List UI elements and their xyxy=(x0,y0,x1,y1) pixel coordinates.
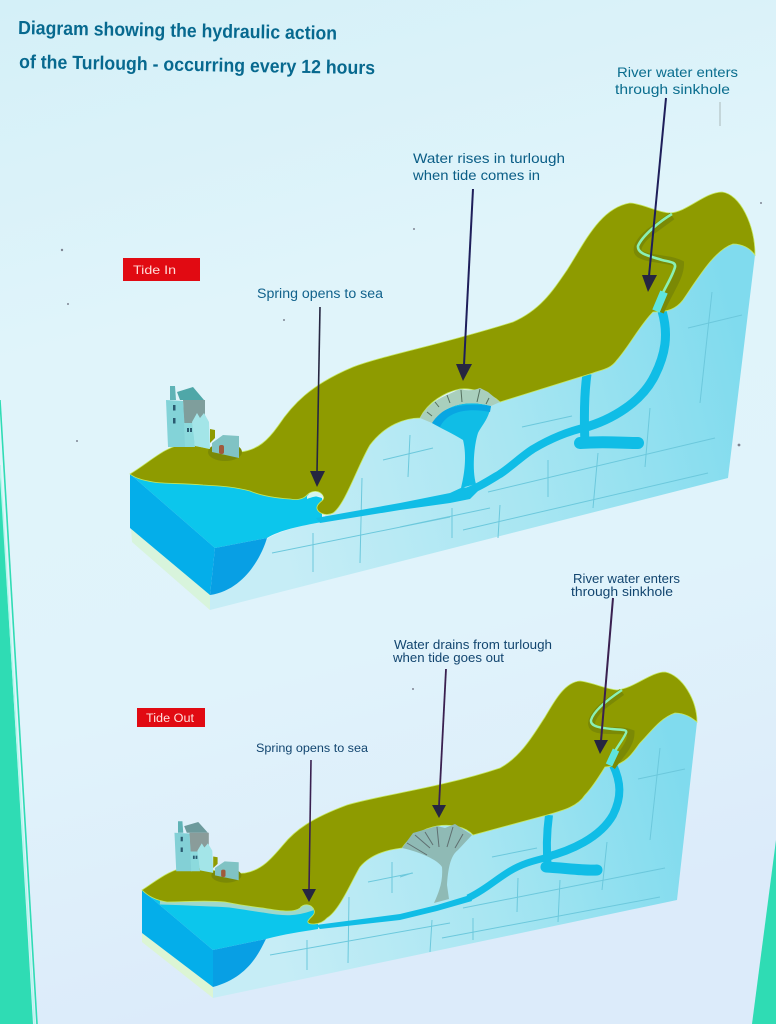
label: tide in xyxy=(123,258,200,281)
label: river water enters (tide in): through sinkhole xyxy=(615,81,730,97)
rock grid lines xyxy=(272,292,742,572)
land surface xyxy=(130,192,755,514)
label: water drains from turlough: Water drains from turlough xyxy=(394,638,552,652)
label: water rises in turlough: Water rises in turlough xyxy=(413,150,565,166)
label: water rises in turlough: when tide comes in xyxy=(412,167,540,183)
arrow: water rises xyxy=(456,189,473,381)
label: water drains from turlough xyxy=(392,638,552,665)
exposed shore xyxy=(160,900,312,911)
label: tide out xyxy=(137,708,205,727)
left green board edge xyxy=(0,400,37,1024)
rock cross-section xyxy=(213,705,697,998)
drained turlough xyxy=(402,824,472,903)
arrow: sinkhole (tide in) xyxy=(642,98,666,292)
sinkhole stream xyxy=(591,690,631,767)
sea xyxy=(130,472,322,595)
icon: castle xyxy=(166,386,242,461)
sea xyxy=(142,888,318,987)
sinkhole stream xyxy=(638,214,680,312)
label: water drains from turlough: when tide goes out xyxy=(392,651,505,665)
label: tide out: Tide Out xyxy=(146,713,195,725)
spring opening xyxy=(307,492,323,499)
right green board edge xyxy=(752,840,776,1024)
arrow: sinkhole (tide out) xyxy=(594,598,613,754)
label: river water enters (tide out): through sinkhole xyxy=(571,585,673,599)
label: river water enters (tide out): River water enters xyxy=(573,572,680,586)
underground river channels xyxy=(316,311,666,523)
arrow: spring (tide out) xyxy=(302,760,316,902)
label: river water enters (tide out) xyxy=(571,572,680,599)
label: water rises in turlough xyxy=(412,150,565,183)
rock cross-section xyxy=(210,238,755,610)
turlough rim xyxy=(420,388,500,423)
land surface xyxy=(142,672,697,924)
icon: castle xyxy=(174,821,241,883)
panel: tide in diagram xyxy=(130,192,755,610)
title: of the Turlough - occurring every 12 hours xyxy=(19,52,375,79)
arrow: water drains xyxy=(432,669,446,818)
label: river water enters (tide in): River water enters xyxy=(617,64,738,80)
panel: tide out diagram xyxy=(142,672,697,998)
label: river water enters (tide in) xyxy=(615,64,738,97)
rock grid lines xyxy=(270,748,685,970)
label: tide in: Tide In xyxy=(133,263,176,277)
label: spring opens to sea (tide in): Spring opens to sea xyxy=(257,286,384,301)
title xyxy=(18,18,375,79)
underground river channels xyxy=(316,765,619,929)
turlough full of water xyxy=(432,403,491,488)
label: spring opens to sea (tide out): Spring opens to sea xyxy=(256,741,368,755)
base strip of block xyxy=(131,528,210,610)
title: Diagram showing the hydraulic action xyxy=(18,18,337,45)
arrow: spring (tide in) xyxy=(310,307,325,487)
base strip of block xyxy=(142,933,213,998)
